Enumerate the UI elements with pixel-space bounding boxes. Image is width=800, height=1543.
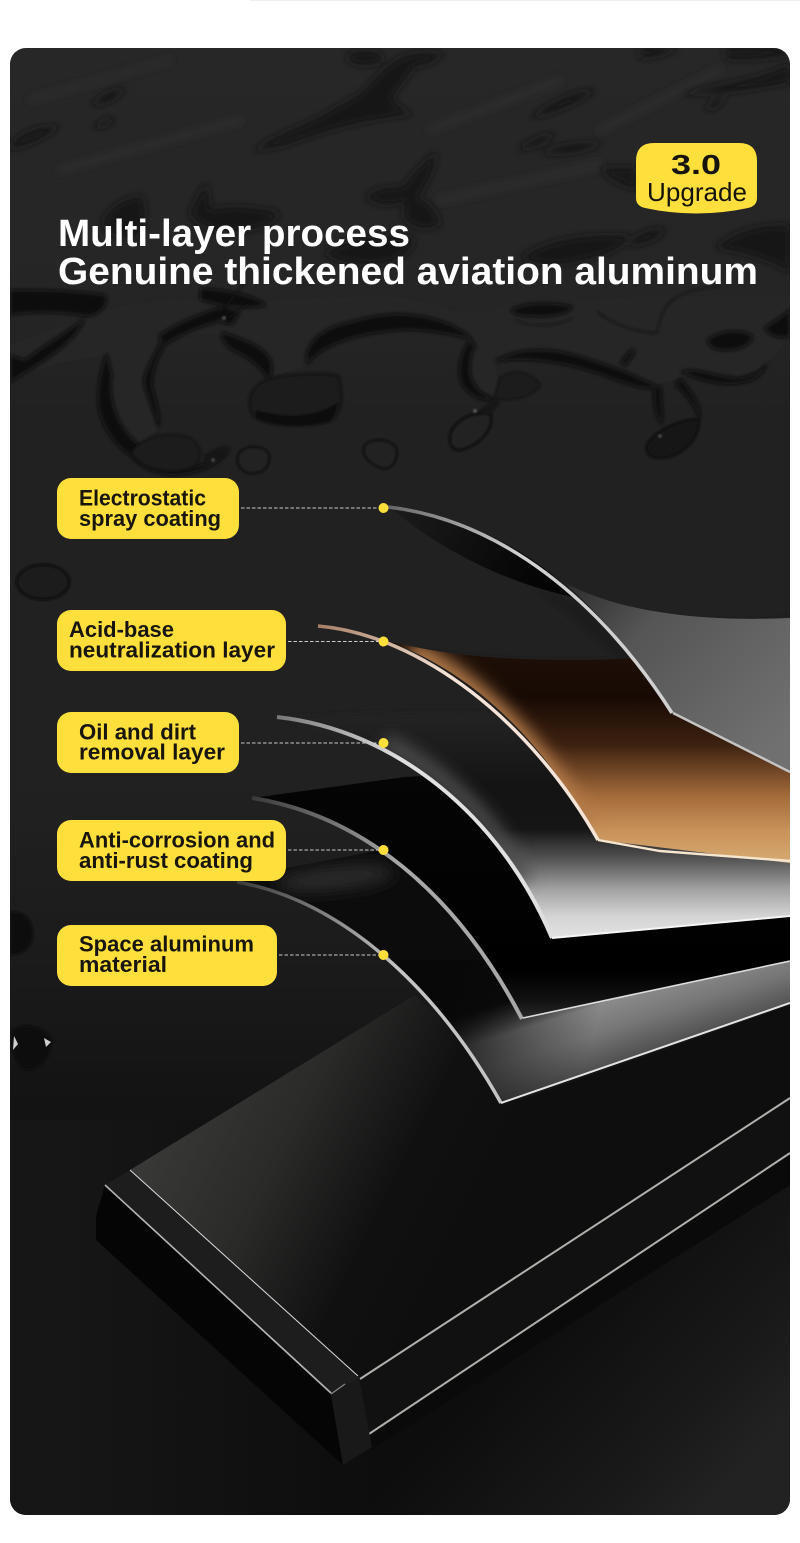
badge: 3.0 upgrade: 3.0 (671, 149, 721, 180)
case top surface (130, 1004, 790, 1315)
case bevel (105, 1170, 359, 1395)
case corner cap (331, 1378, 372, 1465)
badge: 3.0 upgrade: Upgrade (647, 177, 747, 207)
label: oil and dirt removal layer (57, 712, 239, 773)
layer 4: anti-corrosion coating (252, 770, 790, 1019)
case edge highlights (105, 1170, 358, 1394)
label: oil and dirt removal layer: removal layer (79, 740, 225, 765)
case silver trim lines (360, 1098, 790, 1434)
top edge hairline (250, 0, 800, 1)
label: acid-base neutralization layer (57, 610, 286, 671)
floor reflections (10, 1289, 790, 1515)
label: anti-corrosion and anti-rust coating (57, 820, 286, 881)
label: space aluminum material (57, 925, 277, 986)
badge: 3.0 upgrade (636, 143, 757, 214)
title: Genuine thickened aviation aluminum (58, 251, 758, 293)
layer 5: space aluminum material (237, 849, 790, 1110)
label: oil and dirt removal layer: Oil and dirt (79, 719, 197, 744)
title (60, 218, 756, 284)
label: space aluminum material: Space aluminum (79, 932, 254, 957)
label: electrostatic spray coating: Electrostatic (79, 486, 206, 510)
label: space aluminum material: material (79, 952, 167, 977)
label: anti-corrosion and anti-rust coating: anti-rust coating (79, 848, 253, 873)
label: acid-base neutralization layer: neutralization layer (69, 638, 275, 662)
layer 1: electrostatic spray coating (388, 507, 790, 772)
leader lines (241, 508, 383, 955)
label: anti-corrosion and anti-rust coating: Anti-corrosion and (79, 828, 275, 852)
layer 3: oil and dirt removal (277, 713, 790, 938)
title: Multi-layer process (58, 213, 410, 255)
layer 2: copper neutralization (318, 626, 790, 863)
product: aluminum case (96, 995, 790, 1465)
label: acid-base neutralization layer: Acid-base (69, 617, 174, 642)
marker dots (378, 503, 388, 960)
layer shadows on background (280, 590, 790, 760)
case front face (96, 1185, 343, 1465)
label: electrostatic spray coating: spray coating (79, 506, 221, 531)
label: electrostatic spray coating (57, 478, 239, 539)
case side rails (358, 1098, 790, 1434)
